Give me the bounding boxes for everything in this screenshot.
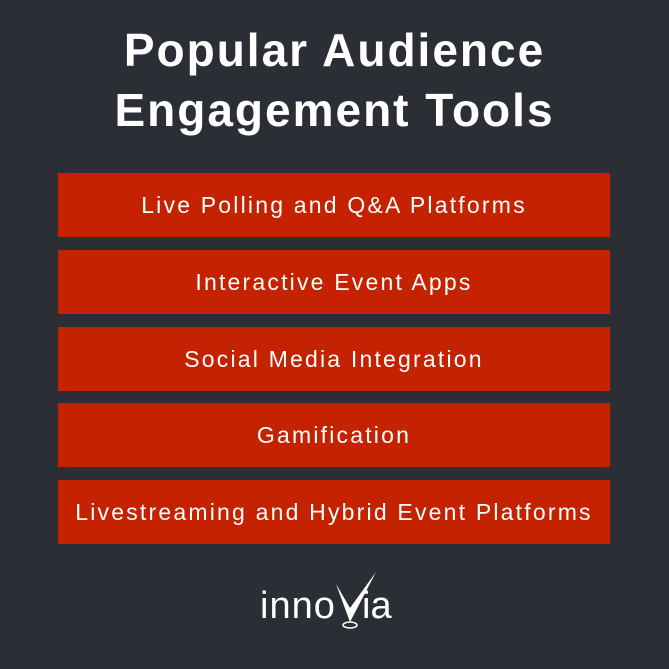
logo: inno: [260, 585, 336, 627]
box: live polling: [58, 173, 610, 237]
box: livestreaming: [58, 480, 610, 544]
title: [114, 24, 555, 136]
box: live polling: Live Polling and Q&A Platforms: [141, 192, 527, 218]
box: social media: [58, 327, 610, 391]
box: event apps: [58, 250, 610, 314]
title: Engagement Tools: [114, 84, 555, 136]
box: event apps: Interactive Event Apps: [195, 268, 473, 294]
box: livestreaming: Livestreaming and Hybrid Event Platforms: [75, 498, 593, 524]
title: Popular Audience: [124, 24, 545, 76]
logo: [260, 572, 392, 629]
logo: ia: [362, 585, 392, 627]
box: social media: Social Media Integration: [184, 346, 484, 372]
box: gamification: Gamification: [257, 422, 411, 448]
box: gamification: [58, 403, 610, 467]
